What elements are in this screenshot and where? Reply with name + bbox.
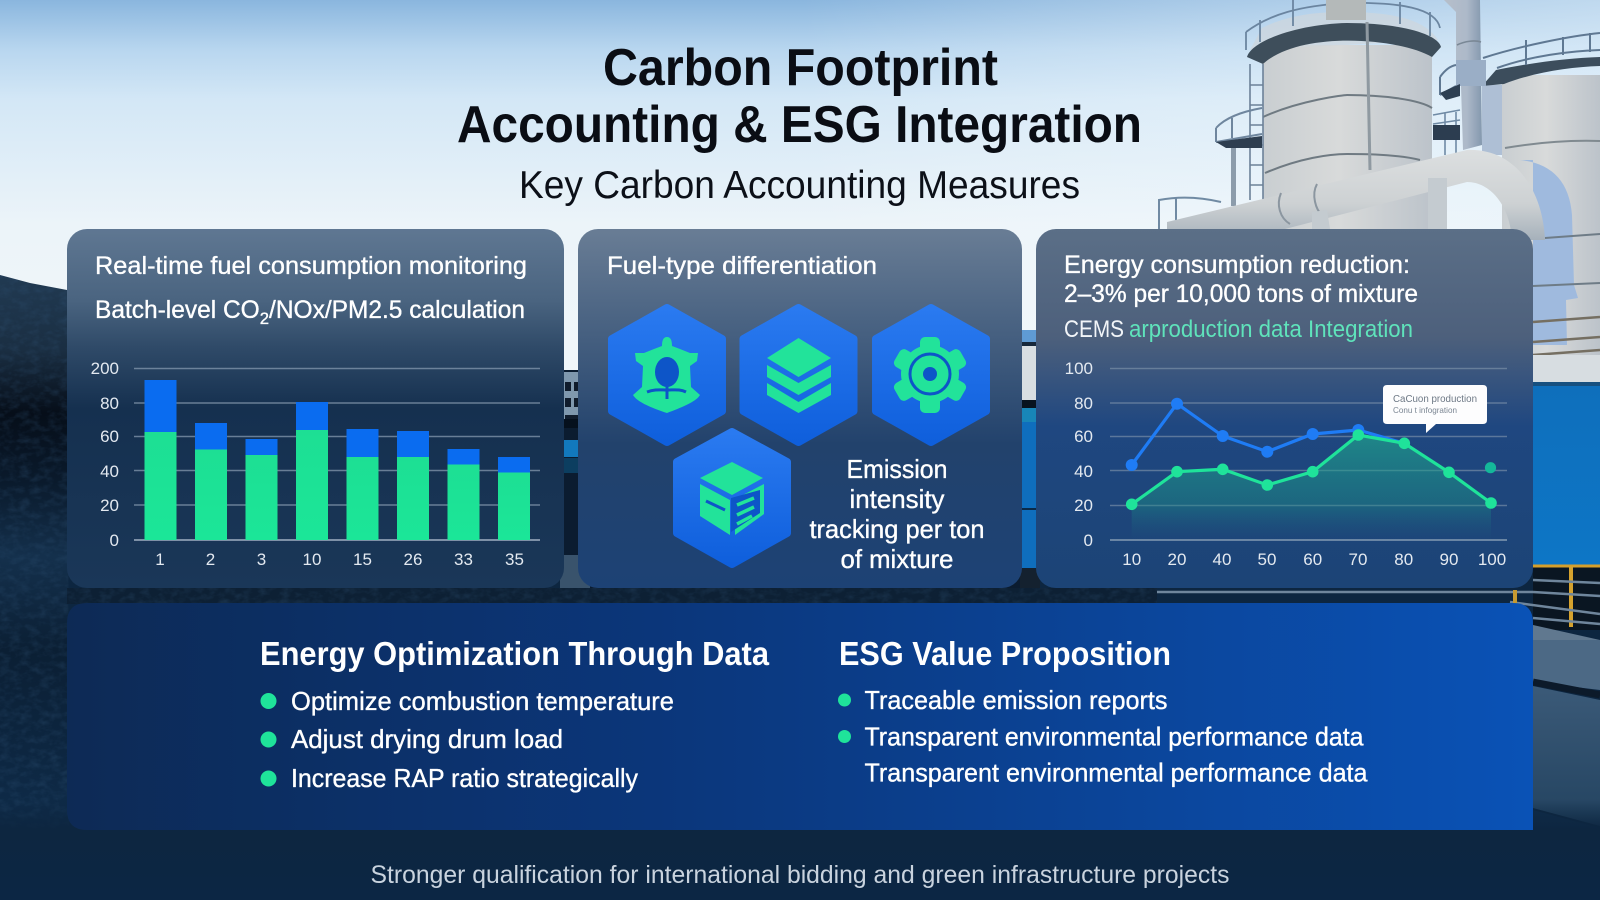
text: batch calculation: 2	[260, 309, 269, 328]
text: batch calculation: Batch-level CO	[95, 296, 263, 324]
line chart: 50	[1258, 550, 1276, 569]
panel: fuel monitoring	[67, 229, 564, 588]
bar chart: 15	[353, 550, 372, 569]
panel: optimization and ESG	[67, 603, 1533, 830]
icon: cube hexagon	[677, 432, 787, 564]
title	[457, 39, 1142, 154]
text: emission intensity: tracking per ton	[810, 514, 984, 544]
bar chart: 33	[454, 550, 473, 569]
bar chart: 40	[100, 462, 119, 481]
bar chart: 26	[404, 550, 422, 569]
bar chart	[91, 359, 540, 569]
background: second tank with shadow	[1482, 33, 1600, 385]
text: emission intensity: of mixture	[840, 544, 954, 574]
background: distant factory building	[560, 330, 1040, 610]
line chart: 80	[1074, 394, 1093, 413]
background: dark foot band	[0, 800, 1600, 900]
panel: energy reduction	[1036, 229, 1533, 588]
heading: energy reduction: Energy consumption reduction:	[1064, 251, 1410, 279]
background: exhaust stack	[1433, 0, 1486, 155]
list: ESG bullets: Transparent environmental performance data	[864, 722, 1364, 752]
background: blue wall and railing	[1100, 382, 1600, 900]
bar chart: 35	[505, 550, 524, 569]
background: dark gravel mound	[0, 275, 70, 900]
line chart: 0	[1084, 531, 1093, 550]
heading: ESG value: ESG Value Proposition	[839, 635, 1171, 672]
heading: energy reduction: 2–3% per 10,000 tons of mixture	[1064, 280, 1418, 308]
bar chart: 3	[257, 550, 266, 569]
background: storage tank	[1159, 0, 1441, 240]
callout: CaCuon production	[1393, 394, 1477, 405]
panel: fuel-type differentiation	[578, 229, 1022, 588]
heading: fuel monitoring: Real-time fuel consumption monitoring	[95, 252, 527, 280]
line chart: 20	[1074, 496, 1093, 515]
list: optimization bullets: Adjust drying drum load	[291, 724, 563, 754]
text: emission intensity	[810, 454, 984, 574]
callout	[1383, 385, 1487, 433]
bar chart: 80	[100, 394, 119, 413]
icon: layers hexagon	[744, 308, 854, 442]
title: Accounting & ESG Integration	[457, 96, 1142, 154]
text: batch calculation: /NOx/PM2.5 calculation	[269, 296, 525, 324]
heading: energy optimization: Energy Optimization Through Data	[260, 635, 770, 672]
callout: Conu t infogration	[1393, 405, 1457, 415]
bar chart: 2	[206, 550, 215, 569]
icon: leaf gear hexagon	[612, 308, 722, 442]
bar chart: 200	[91, 359, 119, 378]
heading: energy reduction	[1064, 251, 1418, 308]
line chart: 60	[1303, 550, 1322, 569]
bar chart: 60	[100, 427, 119, 446]
footer text: Stronger qualification for international bidding and green infrastructure projects	[370, 861, 1230, 889]
list: ESG bullets	[838, 685, 1368, 788]
line chart: 100	[1478, 550, 1506, 569]
bar chart: 20	[100, 496, 119, 515]
line chart: 80	[1394, 550, 1413, 569]
text: CEMS integration: CEMS	[1064, 316, 1124, 343]
line chart: 20	[1168, 550, 1186, 569]
line chart: 10	[1122, 550, 1141, 569]
list: optimization bullets: Increase RAP ratio strategically	[291, 763, 638, 793]
line chart: 40	[1074, 462, 1093, 481]
line chart: 40	[1213, 550, 1231, 569]
list: ESG bullets: Transparent environmental performance data	[864, 758, 1368, 788]
line chart: 100	[1065, 359, 1093, 378]
background: large curved pipe	[1167, 150, 1545, 240]
text: CEMS integration: arproduction data Integration	[1129, 316, 1413, 343]
text: emission intensity: intensity	[850, 484, 944, 514]
text: emission intensity: Emission	[846, 454, 948, 484]
background: gravel strip between panels	[67, 588, 1157, 604]
heading: fuel type: Fuel-type differentiation	[607, 252, 877, 280]
list: ESG bullets: Traceable emission reports	[864, 685, 1168, 715]
bar chart: 1	[155, 550, 165, 569]
line chart	[1065, 359, 1507, 569]
subtitle: Key Carbon Accounting Measures	[519, 164, 1080, 207]
bar chart: 10	[303, 550, 321, 569]
title: Carbon Footprint	[603, 39, 998, 97]
list: optimization bullets: Optimize combustion temperature	[291, 686, 674, 716]
line chart: 60	[1074, 427, 1093, 446]
bar chart: 0	[110, 531, 119, 550]
line chart: 70	[1349, 550, 1367, 569]
icon: gear hexagon	[876, 308, 986, 442]
list: optimization bullets	[260, 686, 674, 793]
line chart: 90	[1440, 550, 1458, 569]
